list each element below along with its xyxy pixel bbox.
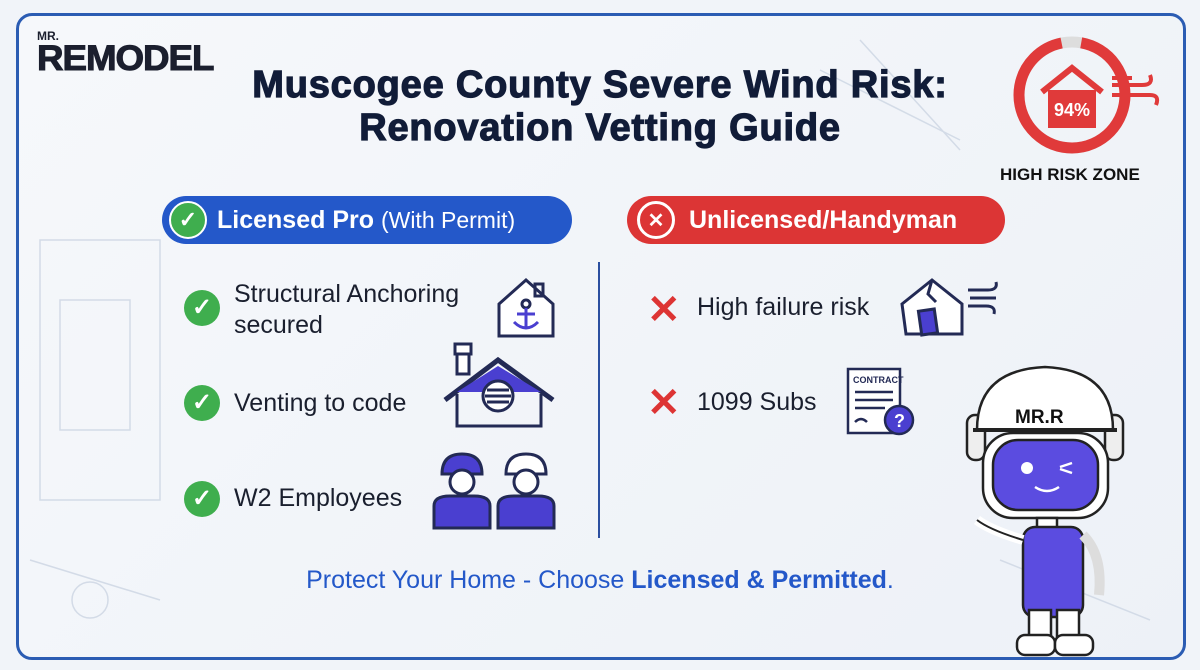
pill: licensed: ✓ (179, 207, 197, 232)
licensed items (184, 280, 459, 517)
icon: contract (846, 368, 914, 436)
icon: workers (432, 452, 556, 530)
licensed items: Venting to code (234, 389, 406, 417)
title: Renovation Vetting Guide (359, 107, 841, 149)
pill: unlicensed (627, 196, 1005, 244)
logo: MR. (37, 29, 59, 43)
footer: Protect Your Home - Choose Licensed & Permitted. (306, 566, 894, 594)
logo: REMODEL (37, 39, 213, 78)
unlicensed items: ✕ (647, 288, 681, 332)
unlicensed items: High failure risk (697, 293, 869, 321)
title (252, 64, 948, 149)
risk gauge (1000, 36, 1160, 184)
pill: unlicensed: Unlicensed/Handyman (689, 206, 957, 234)
pill: licensed: Licensed Pro (217, 206, 374, 234)
divider (598, 262, 600, 538)
icon: contract: CONTRACT (853, 375, 904, 385)
licensed items: Structural Anchoring (234, 280, 459, 308)
icon: roof vent (444, 342, 554, 428)
licensed items: ✓ (192, 389, 212, 416)
risk gauge: 94% (1054, 100, 1090, 120)
unlicensed items (647, 288, 870, 425)
licensed items: ✓ (192, 294, 212, 321)
licensed items: ✓ (192, 485, 212, 512)
title: Muscogee County Severe Wind Risk: (252, 64, 948, 106)
risk gauge: HIGH RISK ZONE (1000, 165, 1140, 184)
pill: unlicensed: ✕ (648, 210, 664, 232)
pill: licensed (162, 196, 572, 244)
mascot robot (966, 366, 1124, 656)
icon: cracked house with wind (900, 278, 998, 337)
licensed items: W2 Employees (234, 484, 402, 512)
icon: anchored house (498, 278, 554, 338)
licensed items: secured (234, 311, 323, 339)
mascot robot: MR.R (1015, 407, 1064, 428)
unlicensed items: 1099 Subs (697, 388, 817, 416)
icon: contract: ? (894, 411, 905, 431)
pill: licensed: (With Permit) (381, 206, 515, 232)
unlicensed items: ✕ (647, 381, 681, 425)
